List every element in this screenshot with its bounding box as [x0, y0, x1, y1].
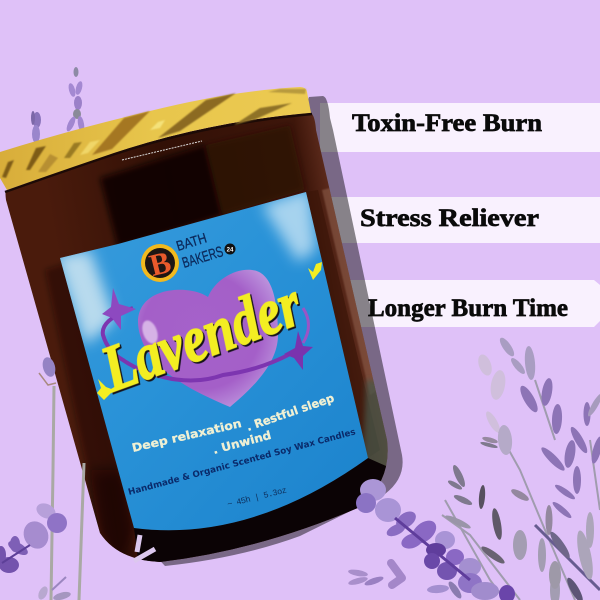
heart — [138, 270, 278, 407]
left lavender stems — [39, 356, 84, 600]
benefits text — [131, 391, 336, 457]
ribbon: longer burn time — [320, 280, 600, 327]
benefits text: . Unwind — [211, 428, 273, 457]
candle jar — [6, 113, 395, 575]
jar shadow — [150, 96, 403, 566]
logo: BATH — [174, 230, 209, 254]
label: toxin-free burn: Toxin-Free Burn — [352, 110, 542, 137]
lower left lavender sprig — [0, 500, 72, 600]
logo — [141, 230, 236, 283]
light rays — [55, 188, 316, 345]
logo: 24 — [227, 248, 234, 254]
benefits text: Deep relaxation — [131, 416, 243, 455]
sprig over jar base — [134, 535, 155, 561]
black upper glass panel — [100, 145, 222, 248]
base dark — [134, 458, 386, 562]
lip shine — [122, 141, 202, 160]
hearts flourish — [97, 262, 322, 400]
benefits text: . Restful sleep — [244, 391, 336, 434]
label: longer burn time: Longer Burn Time — [368, 295, 568, 322]
lower right lavender bouquet — [348, 336, 600, 600]
purple blossom sprig — [356, 479, 515, 600]
lavender sprigs behind jar — [31, 67, 85, 143]
ring and stars — [102, 288, 313, 381]
pale leaves — [476, 353, 507, 434]
purple leaves — [517, 377, 600, 520]
label: stress reliever: Stress Reliever — [360, 205, 539, 232]
tagline: Handmade & Organic Scented Soy Wax Candles — [127, 427, 357, 498]
logo: B — [146, 244, 174, 283]
left glass darker band — [45, 262, 134, 560]
small sprig at bottom — [348, 563, 402, 587]
branches — [442, 380, 600, 600]
product label — [55, 188, 368, 530]
wooden lid — [0, 87, 312, 192]
ribbon: stress reliever — [320, 197, 600, 243]
glass body — [6, 113, 388, 562]
logo: BAKERS — [180, 243, 225, 272]
lavender wordmark: Lavender — [91, 267, 312, 406]
dark grey leaves — [444, 441, 585, 600]
size text: ~ 45h | 5.3oz — [226, 485, 288, 510]
ribbon: toxin-free burn — [320, 103, 600, 152]
right side reflection — [314, 190, 368, 436]
